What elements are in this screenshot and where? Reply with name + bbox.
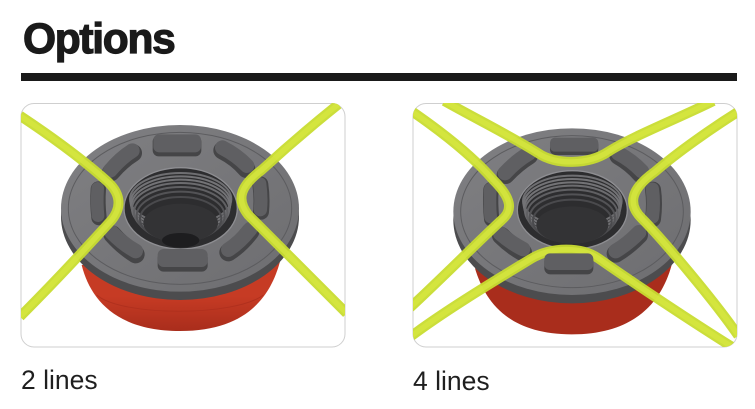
icon: bottom lug over the line — [544, 253, 593, 274]
icon: threaded centre hole — [517, 171, 627, 249]
title: Options — [23, 16, 174, 63]
icon: yellow trimmer lines — [20, 104, 347, 317]
icon: lugs below the lines — [490, 138, 654, 254]
heading rule — [21, 73, 737, 81]
panel: 4 lines — [410, 101, 738, 348]
icon: grey flange — [453, 128, 691, 303]
label: 2 lines: 2 lines — [21, 365, 98, 395]
icon: threaded centre hole — [124, 168, 237, 249]
icon: grey flange — [61, 125, 299, 300]
label: 4 lines: 4 lines — [413, 366, 490, 396]
icon: red spool body — [82, 262, 280, 331]
icon: yellow trimmer lines — [410, 101, 738, 348]
icon: red spool body — [475, 265, 672, 334]
icon: eight raised lugs — [97, 134, 262, 272]
panel: 2 lines — [20, 104, 347, 347]
